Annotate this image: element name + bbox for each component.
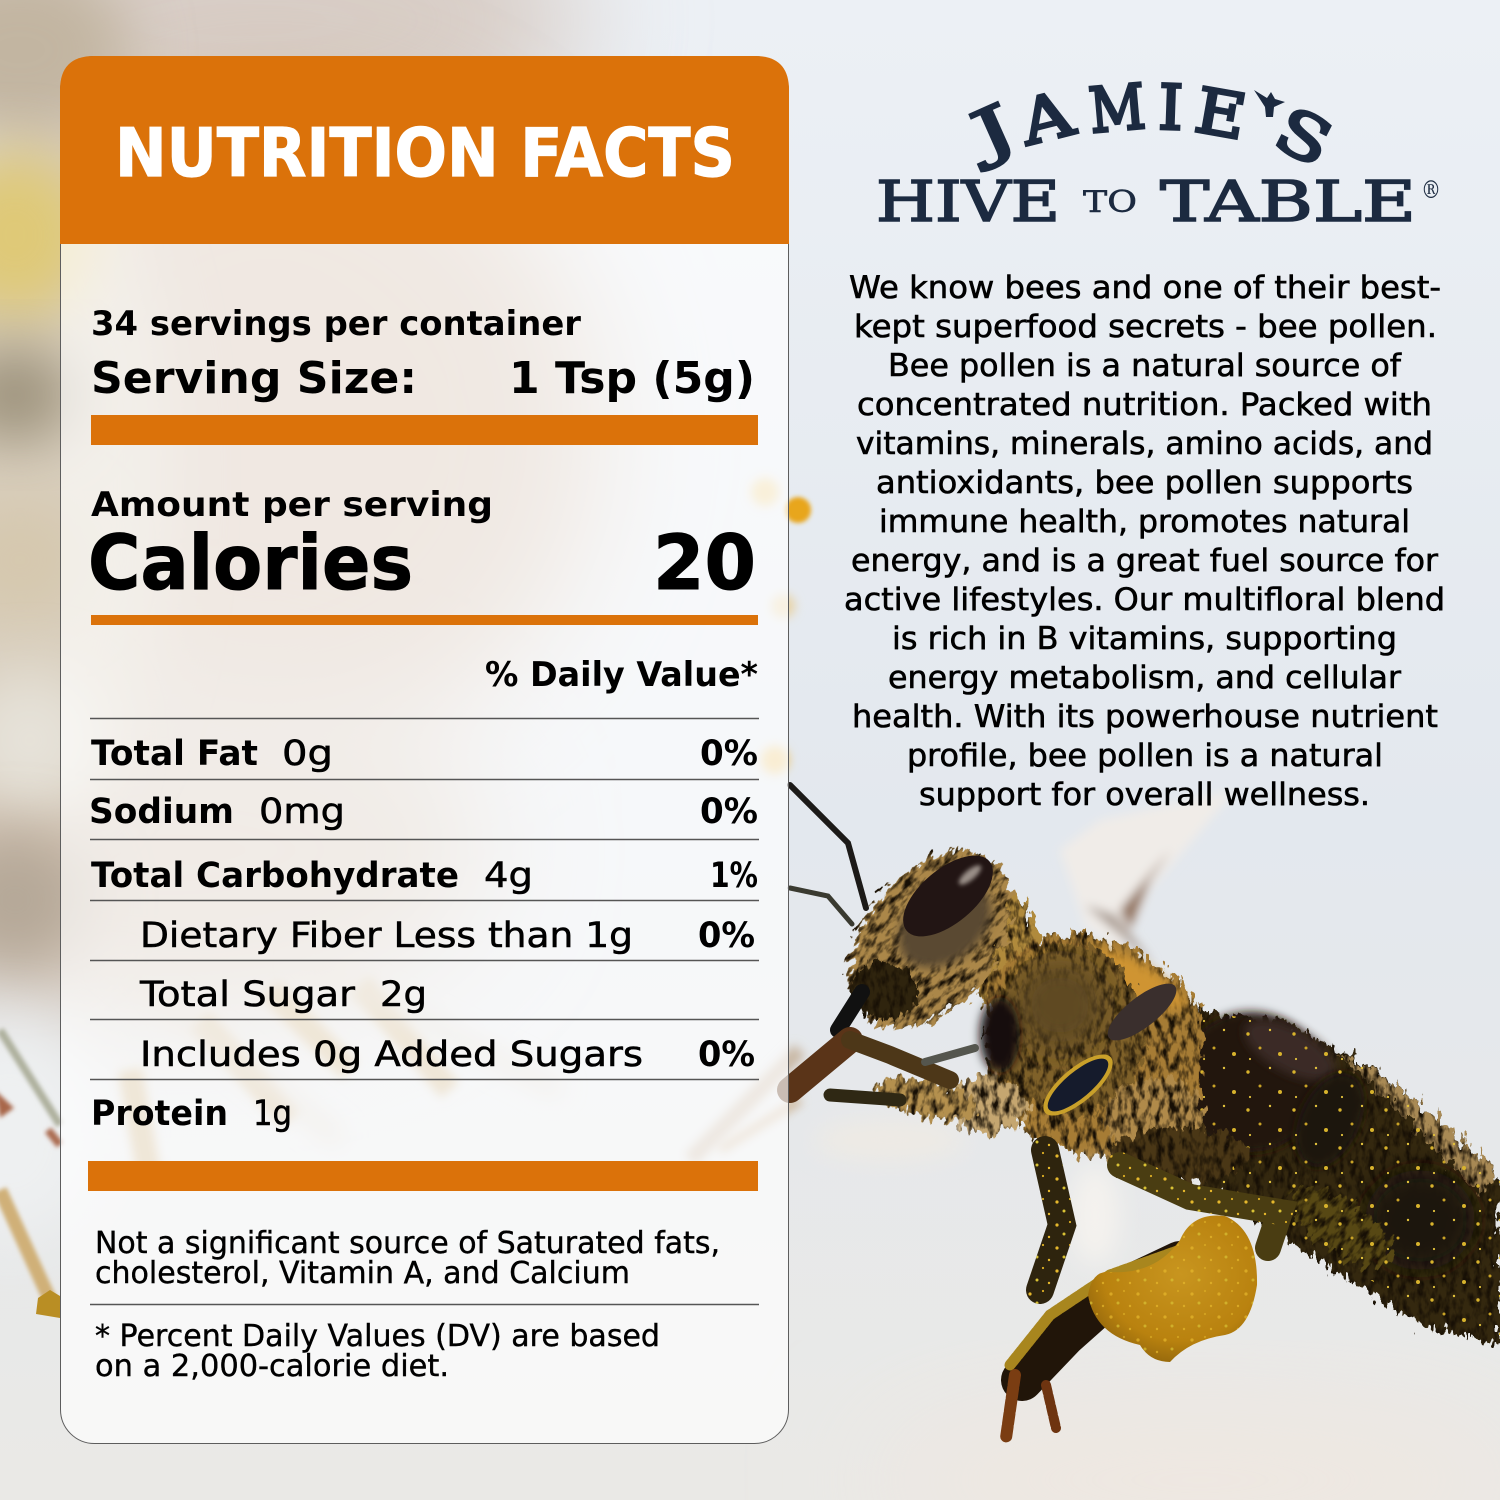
text block: brand description: support for overall wellness. xyxy=(919,777,1370,813)
bee front legs xyxy=(790,992,980,1160)
calories row: Calories xyxy=(88,518,413,607)
row: total sugar: Total Sugar xyxy=(139,975,356,1015)
logo: Jamie's Hive to Table xyxy=(876,70,1441,235)
illustration: honey bee with pollen basket xyxy=(790,785,1500,1438)
bee hind leg xyxy=(1006,1250,1180,1438)
text block: brand description: antioxidants, bee pollen supports xyxy=(876,465,1413,501)
text block: brand description: profile, bee pollen is a natural xyxy=(907,738,1383,774)
bee head xyxy=(816,821,1044,1059)
logo arched word: Jamie's: J xyxy=(954,90,1025,175)
bee pollen ball xyxy=(1088,1216,1257,1362)
serving size row: Serving Size: xyxy=(91,353,417,404)
logo line: Hive to Table: HIVE xyxy=(876,170,1060,235)
table rules xyxy=(90,718,759,1304)
serving size row: 1 Tsp (5g) xyxy=(509,353,755,404)
row: dietary fiber: Dietary Fiber Less than 1g xyxy=(140,916,633,956)
row: sodium: Sodium xyxy=(89,792,234,832)
bee middle leg xyxy=(1040,1150,1280,1290)
logo line: Hive to Table: ® xyxy=(1421,176,1441,204)
row: sodium xyxy=(89,792,758,832)
heading: nutrition facts: NUTRITION FACTS xyxy=(115,114,735,192)
text block: brand description: health. With its powerhouse nutrient xyxy=(852,699,1438,735)
divider bar 3 xyxy=(88,1161,758,1191)
row: total fat: Total Fat xyxy=(91,734,258,774)
note: not a significant source: Not a significant source of Saturated fats, xyxy=(95,1226,720,1261)
logo arched word: Jamie's xyxy=(954,70,1344,181)
servings per container: 34 servings per container xyxy=(91,304,581,344)
logo arched word: Jamie's: E xyxy=(1190,75,1251,154)
logo arched word: Jamie's: S xyxy=(1264,93,1344,181)
row: total fat xyxy=(91,734,758,774)
text block: brand description: vitamins, minerals, amino acids, and xyxy=(856,426,1433,462)
logo bee icon xyxy=(1254,90,1285,117)
row: total carbohydrate: 1% xyxy=(710,856,758,896)
logo line: Hive to Table xyxy=(876,170,1441,235)
text block: brand description: energy, and is a great fuel source for xyxy=(851,543,1438,579)
text block: brand description xyxy=(844,270,1445,813)
row: total sugar: 2g xyxy=(380,975,427,1015)
footnote: percent daily values xyxy=(95,1319,660,1384)
row: total carbohydrate: Total Carbohydrate xyxy=(91,856,459,896)
logo arched word: Jamie's: I xyxy=(1157,71,1184,144)
row: added sugars: Includes 0g Added Sugars xyxy=(140,1035,643,1075)
logo line: Hive to Table: TO xyxy=(1083,185,1137,220)
serving size row xyxy=(91,353,755,404)
calories row: 20 xyxy=(653,518,756,607)
header band xyxy=(60,56,789,244)
logo arched word: Jamie's: A xyxy=(1012,77,1081,160)
text block: brand description: energy metabolism, and cellular xyxy=(888,660,1401,696)
row: sodium: 0% xyxy=(700,792,758,832)
row: protein: Protein xyxy=(91,1094,228,1134)
row: total carbohydrate: 4g xyxy=(484,856,533,896)
bee antennae xyxy=(790,785,866,924)
daily value heading: % Daily Value* xyxy=(485,655,758,695)
bee wing xyxy=(1060,790,1235,965)
row: sodium: 0mg xyxy=(259,792,345,832)
text block: brand description: concentrated nutrition. Packed with xyxy=(857,387,1432,423)
divider bar 1 xyxy=(91,415,758,445)
footnote: percent daily values: * Percent Daily Values (DV) are based xyxy=(95,1319,660,1354)
bee wing bases xyxy=(1034,974,1184,1126)
text block: brand description: kept superfood secrets - bee pollen. xyxy=(854,309,1437,345)
row: total fat: 0% xyxy=(700,734,758,774)
logo line: Hive to Table: TABLE xyxy=(1160,170,1416,235)
row: total fat: 0g xyxy=(282,734,333,774)
bee thorax xyxy=(943,895,1250,1183)
footnote: percent daily values: on a 2,000-calorie diet. xyxy=(95,1349,449,1384)
divider bar 2 xyxy=(91,615,758,625)
text block: brand description: immune health, promotes natural xyxy=(879,504,1410,540)
calories row xyxy=(88,518,756,607)
row: added sugars: 0% xyxy=(698,1035,755,1075)
amount per serving: Amount per serving xyxy=(91,485,493,525)
row: total carbohydrate xyxy=(91,856,758,896)
row: total sugar xyxy=(139,975,427,1015)
text block: brand description: Bee pollen is a natural source of xyxy=(888,348,1402,384)
row: dietary fiber: 0% xyxy=(698,916,755,956)
logo arched word: Jamie's: M xyxy=(1086,70,1148,147)
note: not a significant source xyxy=(95,1226,720,1291)
note: not a significant source: cholesterol, Vitamin A, and Calcium xyxy=(95,1256,630,1291)
bee abdomen xyxy=(1120,1000,1500,1345)
text block: brand description: is rich in B vitamins, supporting xyxy=(892,621,1397,657)
text block: brand description: active lifestyles. Our multifloral blend xyxy=(844,582,1445,618)
panel: nutrition facts card xyxy=(60,56,789,1444)
card background xyxy=(60,56,788,1444)
row: protein: 1g xyxy=(253,1094,292,1134)
text block: brand description: We know bees and one of their best- xyxy=(849,270,1441,306)
